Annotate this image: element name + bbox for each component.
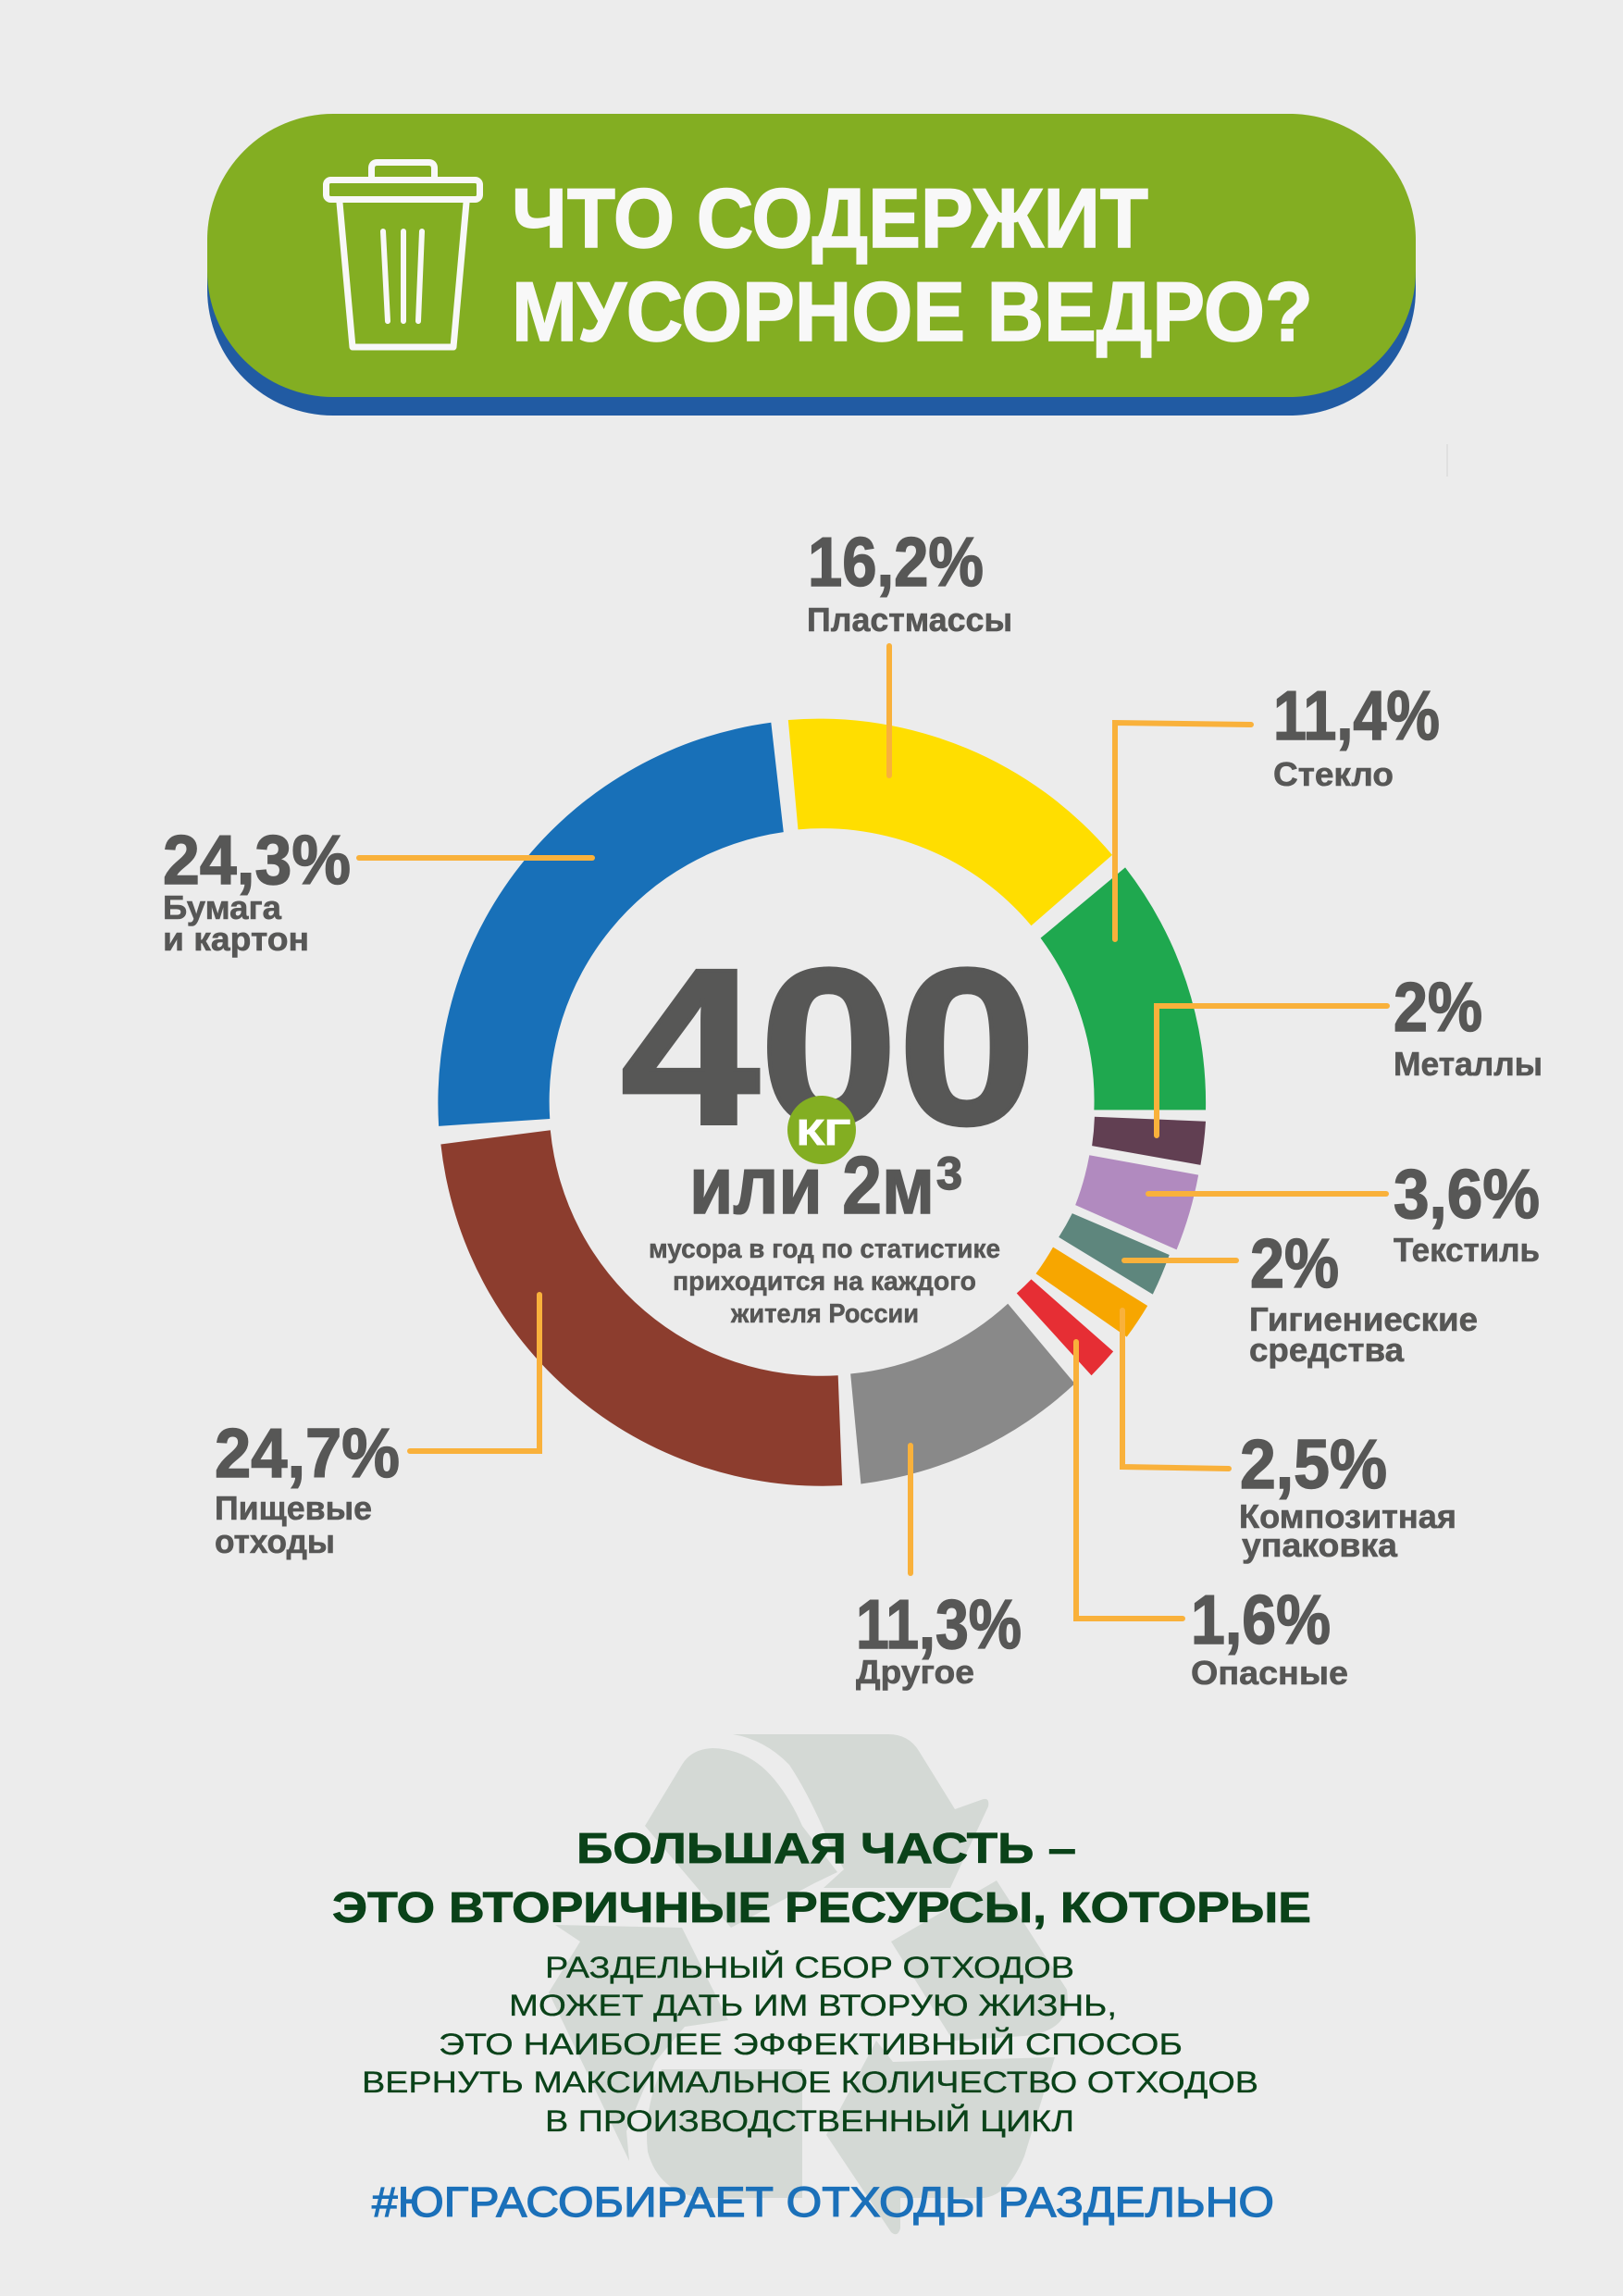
leader: glass — [1115, 723, 1251, 939]
body text: ЭТО НАИБОЛЕЕ ЭФФЕКТИВНЫЙ СПОСОБ — [439, 2028, 1183, 2061]
label: composite: 2,5% — [1240, 1425, 1387, 1503]
bottom heading: БОЛЬШАЯ ЧАСТЬ – — [576, 1824, 1076, 1872]
title banner — [207, 114, 1416, 416]
label: textile: 3,6% — [1394, 1155, 1540, 1233]
label: hazardous: Опасные — [1191, 1654, 1348, 1692]
leader: metals — [1157, 1006, 1387, 1136]
label: metals: 2% — [1394, 968, 1482, 1046]
body text: МОЖЕТ ДАТЬ ИМ ВТОРУЮ ЖИЗНЬ, — [509, 1989, 1117, 2022]
segment: plastics — [788, 719, 1112, 925]
segment: composite packaging — [1036, 1247, 1147, 1337]
segment: hygiene products — [1059, 1213, 1170, 1295]
label: composite: Композитная — [1239, 1497, 1456, 1535]
label: paper: Бумага — [163, 888, 282, 926]
label: other — [856, 1585, 1022, 1691]
label: food — [215, 1414, 400, 1560]
volume: или 2м — [689, 1139, 935, 1231]
badge: kg: КГ — [797, 1113, 850, 1153]
body text — [362, 1951, 1258, 2138]
leader: plastics — [886, 646, 892, 776]
label: glass: 11,4% — [1273, 676, 1440, 754]
body text: ВЕРНУТЬ МАКСИМАЛЬНОЕ КОЛИЧЕСТВО ОТХОДОВ — [362, 2066, 1258, 2099]
body text: РАЗДЕЛЬНЫЙ СБОР ОТХОДОВ — [545, 1951, 1074, 1984]
label: plastics: Пластмассы — [807, 601, 1012, 639]
label: paper: и картон — [163, 920, 309, 958]
segment: paper and cardboard — [438, 723, 784, 1126]
segment: food waste — [440, 1130, 842, 1486]
label: food: Пищевые — [215, 1489, 372, 1527]
segment: textile — [1075, 1155, 1198, 1249]
label: textile — [1394, 1155, 1540, 1269]
label: hygiene: Гигиениеские — [1249, 1300, 1478, 1338]
label: hazardous — [1191, 1581, 1348, 1692]
segment: metals — [1092, 1117, 1206, 1165]
leader: food — [410, 1295, 539, 1451]
leader: composite — [1122, 1310, 1229, 1469]
label: composite: упаковка — [1242, 1526, 1398, 1564]
label: paper — [163, 821, 351, 958]
heading: МУСОРНОЕ ВЕДРО? — [512, 266, 1313, 359]
heading: ЧТО СОДЕРЖИТ — [512, 172, 1148, 266]
segment: hazardous — [1017, 1279, 1113, 1375]
heading — [512, 172, 1313, 359]
center caption: мусора в год по статистике — [649, 1235, 1000, 1264]
label: other: Другое — [856, 1653, 974, 1691]
donut chart — [438, 719, 1206, 1486]
label: hygiene: 2% — [1250, 1224, 1339, 1302]
bottom heading: ЭТО ВТОРИЧНЫЕ РЕСУРСЫ, КОТОРЫЕ — [332, 1883, 1311, 1931]
badge: kg — [787, 1096, 856, 1164]
label: glass: Стекло — [1273, 755, 1394, 793]
label: metals — [1394, 968, 1542, 1083]
center total — [621, 923, 1036, 1329]
label: food: 24,7% — [215, 1414, 400, 1492]
center total: 400 — [621, 923, 1036, 1171]
label: glass — [1273, 676, 1440, 793]
segment: glass — [1041, 867, 1206, 1110]
center caption: жителя России — [730, 1299, 919, 1329]
leader: hazardous — [1076, 1342, 1183, 1619]
bottom heading — [332, 1824, 1311, 1931]
label: other: 11,3% — [856, 1585, 1022, 1663]
icon: recycling symbol watermark — [549, 1734, 1068, 2234]
label: plastics — [807, 523, 1012, 639]
body text: В ПРОИЗВОДСТВЕННЫЙ ЦИКЛ — [545, 2104, 1074, 2138]
label: food: отходы — [215, 1522, 335, 1560]
icon: trash can — [326, 163, 479, 347]
label: composite — [1239, 1425, 1456, 1564]
hashtag: #ЮГРАСОБИРАЕТ ОТХОДЫ РАЗДЕЛЬНО — [372, 2178, 1274, 2226]
leader: hygiene — [1124, 1258, 1236, 1263]
label: hygiene: средства — [1249, 1331, 1405, 1369]
center caption: приходится на каждого — [673, 1267, 976, 1297]
leader: other — [908, 1446, 913, 1573]
label: paper: 24,3% — [163, 821, 351, 899]
leader: paper — [359, 855, 592, 861]
segment: other — [850, 1304, 1075, 1483]
volume: 3 — [936, 1148, 962, 1199]
label: plastics: 16,2% — [808, 523, 984, 601]
leader: textile — [1148, 1191, 1386, 1197]
center caption — [649, 1235, 1000, 1329]
label: textile: Текстиль — [1394, 1231, 1540, 1269]
label: hazardous: 1,6% — [1191, 1581, 1331, 1658]
label: hygiene — [1249, 1224, 1478, 1369]
label: metals: Металлы — [1394, 1045, 1542, 1083]
